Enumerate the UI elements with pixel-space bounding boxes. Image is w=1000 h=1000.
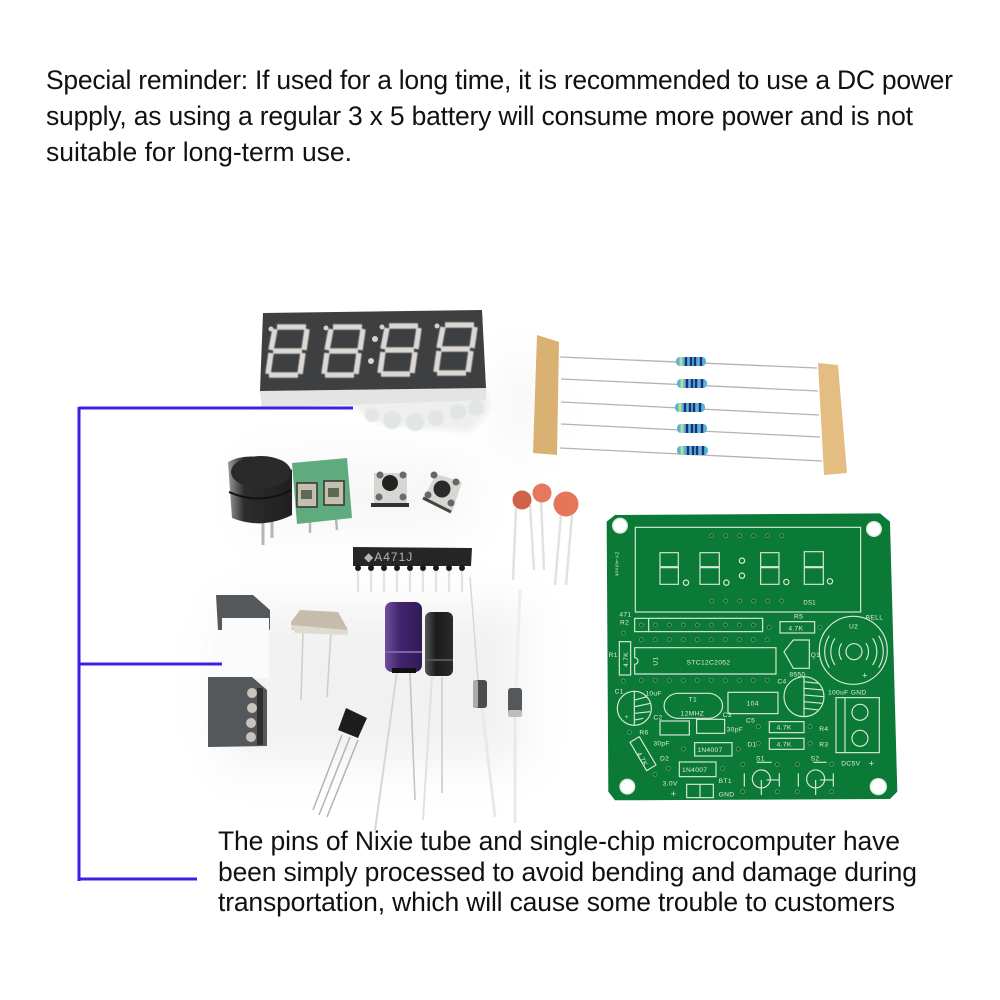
PCB board	[607, 513, 897, 800]
soft photo backdrop shadows	[225, 360, 535, 765]
silkscreen labels: DS1	[803, 600, 816, 606]
callout: pins note	[218, 826, 917, 917]
silkscreen labels	[609, 552, 883, 799]
connector line: callout	[79, 878, 197, 880]
silkscreen labels: +	[862, 670, 868, 680]
crystal oscillator	[291, 610, 348, 700]
callout: pins note: been simply processed to avoid bending and damage during	[218, 857, 917, 887]
silkscreen labels: C3	[723, 712, 732, 719]
silkscreen labels: 30pF	[653, 741, 670, 748]
silkscreen labels: R4	[819, 726, 828, 733]
green terminal block	[292, 458, 352, 533]
silkscreen labels: 1N4007	[697, 747, 723, 754]
silkscreen labels: C1	[615, 689, 624, 696]
resistor network	[353, 547, 472, 592]
ceramic capacitors	[512, 484, 578, 585]
silkscreen labels: ZY-4clock	[613, 552, 619, 577]
silkscreen labels: R5	[794, 613, 803, 620]
silkscreen labels: STC12C2052	[687, 659, 730, 666]
heading: special reminder	[46, 65, 953, 167]
connector line: vertical bracket	[78, 407, 80, 881]
silkscreen labels: DC5V	[841, 761, 861, 768]
silkscreen labels: 471	[619, 611, 631, 618]
silkscreen labels: BELL	[866, 614, 883, 621]
tactile button 2	[423, 472, 462, 512]
silkscreen labels: T1	[689, 697, 697, 704]
silkscreen labels: 30pF	[727, 727, 743, 734]
silkscreen labels: R3	[819, 741, 828, 748]
foam under display	[365, 400, 484, 431]
silkscreen labels: D2	[660, 755, 669, 762]
silkscreen labels: 1N4007	[682, 767, 707, 774]
silkscreen labels: C2	[653, 715, 663, 722]
heading: special reminder: Special reminder: If used for a long time, it is recommended to use a DC power	[46, 65, 953, 95]
silkscreen labels: R1	[609, 652, 618, 659]
silkscreen labels: +	[869, 758, 874, 768]
silkscreen labels: 4.7K	[777, 741, 792, 748]
heading: special reminder: supply, as using a regular 3 x 5 battery will consume more power and is not	[46, 101, 914, 131]
4-digit LED display	[260, 310, 490, 432]
silkscreen labels: R2	[620, 619, 629, 626]
silkscreen labels: S2	[811, 755, 819, 762]
silkscreen labels: S1	[756, 755, 765, 762]
callout: pins note: The pins of Nixie tube and single-chip microcomputer have	[218, 826, 900, 856]
mounting holes	[613, 518, 886, 795]
connector line: display	[79, 406, 353, 410]
silkscreen labels: 3.0V	[663, 781, 678, 788]
silkscreen labels: 4.7K	[788, 625, 804, 632]
silkscreen labels: Q1	[811, 652, 820, 659]
silkscreen labels: D1	[747, 741, 757, 748]
black electrolytic capacitor	[423, 612, 453, 820]
silkscreen labels: R6	[639, 729, 649, 736]
silkscreen labels: +	[625, 714, 629, 721]
silkscreen labels: 104	[747, 701, 759, 708]
silkscreen labels: U2	[849, 623, 858, 630]
silkscreen labels: U1	[652, 656, 659, 666]
silkscreen labels: 100uF GND	[828, 689, 866, 696]
tactile button 1	[371, 472, 409, 507]
silkscreen labels: +	[671, 789, 676, 799]
silkscreen labels: 4.7K	[623, 652, 630, 667]
connector line: chip	[79, 662, 225, 666]
silkscreen labels: C5	[746, 717, 755, 724]
silkscreen labels: GND	[719, 791, 734, 798]
heading: special reminder: suitable for long-term use.	[46, 137, 352, 167]
resistors taped strip	[533, 335, 847, 475]
resistor network: ◆A471J	[364, 550, 413, 564]
DIP chip in foam	[208, 595, 270, 747]
silkscreen labels: 4.7K	[635, 751, 649, 768]
buzzer	[228, 456, 292, 545]
silkscreen labels: 10uF	[645, 691, 662, 698]
transistor	[313, 708, 367, 817]
silkscreen labels: 4.7K	[777, 725, 792, 732]
diodes	[470, 577, 522, 823]
silkscreen labels: 8550	[789, 672, 805, 679]
silkscreen labels: C4	[777, 679, 787, 686]
silkscreen labels: 12MHZ	[681, 711, 704, 718]
silkscreen labels: BT1	[719, 778, 732, 785]
callout: pins note: transportation, which will cause some trouble to customers	[218, 887, 895, 917]
purple electrolytic capacitor	[375, 602, 422, 830]
